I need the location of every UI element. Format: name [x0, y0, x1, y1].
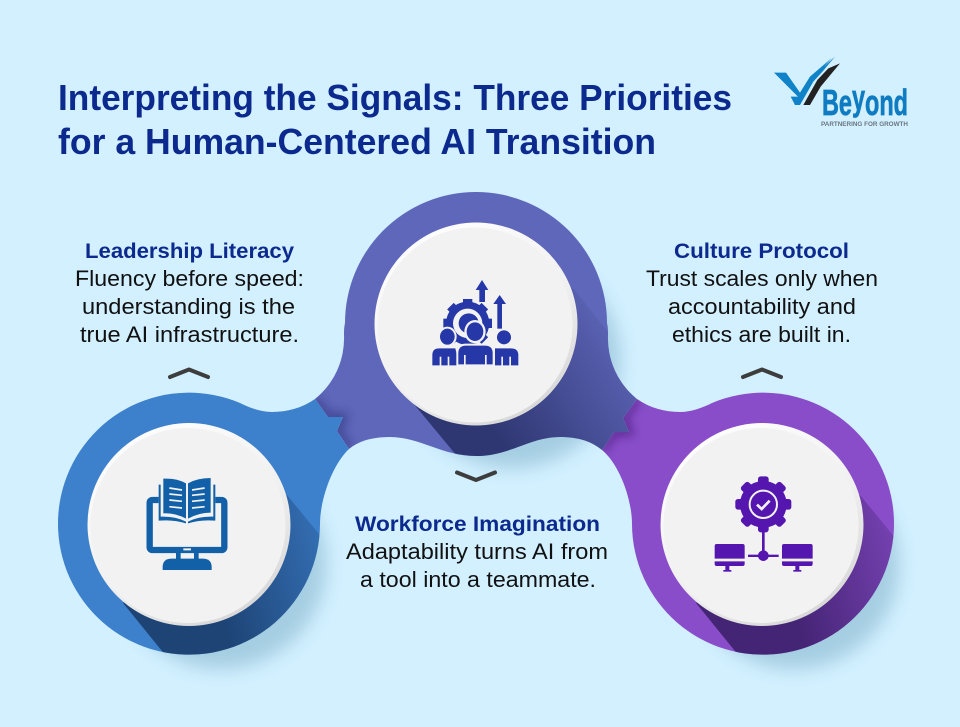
- title: for a Human-Centered AI Transition: [58, 121, 656, 162]
- text block: Leadership Literacy: true AI infrastructure.: [80, 322, 299, 347]
- arrow: chevron down center: [457, 472, 495, 480]
- text block: Culture Protocol: Culture Protocol: [674, 240, 849, 263]
- text block: Leadership Literacy: [75, 240, 304, 347]
- logo: Beyond: y: [852, 77, 865, 118]
- icon: book on monitor: [150, 478, 224, 570]
- panel: leadership literacy blob: [58, 392, 349, 655]
- arrow: chevron up left: [170, 370, 208, 377]
- logo: Beyond: [774, 57, 908, 128]
- arrow: chevron up right: [743, 370, 781, 377]
- logo: Beyond: ond: [865, 82, 908, 123]
- text block: Leadership Literacy: Leadership Literacy: [85, 240, 294, 263]
- white disc: right: [660, 423, 864, 626]
- title: [58, 77, 732, 162]
- panel: workforce imagination blob: [315, 192, 637, 456]
- text block: Workforce Imagination: [346, 513, 608, 592]
- title: Interpreting the Signals: Three Priorities: [58, 77, 732, 118]
- icon: team with gear and growth arrows: [432, 280, 518, 366]
- logo: Beyond: Be: [822, 82, 868, 123]
- text block: Leadership Literacy: Fluency before speed:: [75, 266, 304, 291]
- panel: culture protocol blob: [602, 392, 894, 655]
- text block: Culture Protocol: [646, 240, 878, 347]
- text block: Leadership Literacy: understanding is the: [82, 294, 295, 319]
- text block: Culture Protocol: ethics are built in.: [672, 322, 851, 347]
- text block: Workforce Imagination: Adaptability turns AI from: [346, 539, 608, 564]
- text block: Culture Protocol: Trust scales only when: [646, 266, 878, 291]
- white disc: center: [374, 222, 578, 426]
- text block: Workforce Imagination: Workforce Imagination: [355, 513, 600, 536]
- text block: Culture Protocol: accountability and: [668, 294, 856, 319]
- soft drop shadows: [116, 252, 899, 669]
- text block: Workforce Imagination: a tool into a teammate.: [360, 567, 596, 592]
- white disc: left: [88, 423, 290, 626]
- logo: Beyond: PARTNERING FOR GROWTH: [821, 122, 908, 128]
- icon: gear with check and networked monitors: [715, 476, 813, 572]
